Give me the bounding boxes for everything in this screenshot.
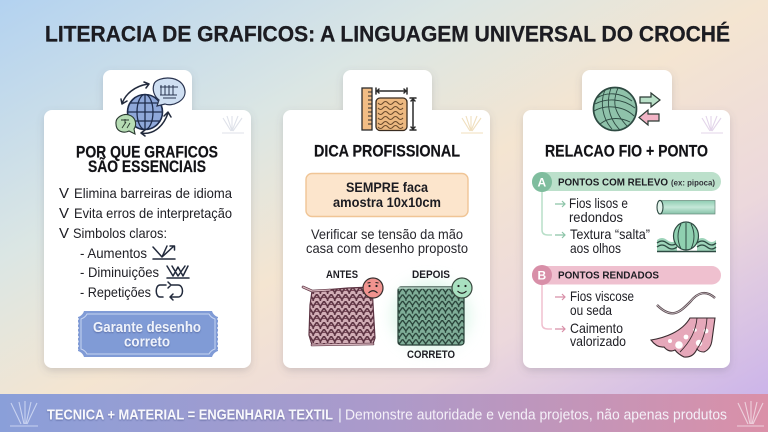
arrow and text: fios lisos [555, 195, 628, 225]
arrow and text: caimento: valorizado [570, 333, 626, 349]
callout: sempre faca amostra: amostra 10x10cm [333, 194, 441, 210]
arrow and text: textura salta: Textura “salta” [570, 226, 650, 242]
text: verificar tensao: Verificar se tensão da mão [311, 226, 463, 242]
heading: RELACAO FIO + PONTO [545, 142, 708, 160]
icon: aumentos symbol [153, 246, 175, 259]
heading [76, 144, 218, 176]
icon: lace fabric [651, 318, 715, 357]
checklist: - Aumentos [80, 245, 147, 261]
panel: dica profissional [283, 70, 490, 368]
icon: popcorn stitch [657, 222, 716, 252]
callout: sempre faca amostra: SEMPRE faca [346, 179, 428, 195]
antes swatch [303, 269, 383, 345]
arrow and text: textura salta: aos olhos [570, 240, 621, 256]
arrow and text: fios viscose: ou seda [570, 302, 612, 318]
checklist: Elimina barreiras de idioma [74, 185, 232, 201]
icon: sad face [363, 278, 383, 298]
section A: pontos com relevo: PONTOS COM RELEVO [558, 176, 668, 188]
card shape 2 [283, 70, 490, 368]
icon: globe with translation bubbles [116, 78, 185, 136]
heading: SÃO ESSENCIAIS [88, 156, 206, 176]
footer text: TECNICA + MATERIAL = ENGENHARIA TEXTIL [47, 406, 333, 424]
checklist: Simbolos claros: [73, 225, 167, 241]
checklist: - Diminuições [80, 264, 159, 280]
icon: diminuicoes symbol [167, 266, 189, 278]
icon: watermark [222, 116, 244, 133]
section A: pontos com relevo [532, 172, 721, 256]
callout: garante desenho correto [78, 311, 218, 357]
icon: footer logo right [737, 401, 764, 426]
footer text: Demonstre autoridade e venda projetos, não apenas produtos [345, 406, 727, 424]
callout: sempre faca amostra [306, 174, 468, 216]
text: verificar tensao [306, 226, 468, 256]
section B: pontos rendados: PONTOS RENDADOS [558, 270, 659, 282]
checklist: - Repetições [80, 284, 151, 300]
heading: DICA PROFISSIONAL [314, 142, 460, 160]
arrow and text: caimento: Caimento [570, 320, 623, 336]
section A: pontos com relevo: A [538, 176, 546, 190]
arrow and text: textura salta [555, 226, 650, 256]
antes swatch: ANTES [326, 269, 358, 281]
title: LITERACIA DE GRAFICOS: A LINGUAGEM UNIVERSAL DO CROCHÉ [45, 22, 730, 46]
checklist: V [59, 225, 69, 242]
panel: relacao fio + ponto [523, 70, 730, 368]
text: verificar tensao: casa com desenho proposto [306, 240, 468, 256]
section A: pontos com relevo: (ex: pipoca) [671, 178, 715, 188]
arrow and text: fios viscose [555, 288, 634, 318]
checklist: V [59, 185, 69, 202]
depois swatch: DEPOIS [412, 269, 450, 281]
icon: watermark [701, 116, 723, 133]
arrow and text: caimento [555, 320, 626, 349]
arrow and text: fios lisos: redondos [569, 209, 623, 225]
icon: silky yarn [657, 293, 715, 313]
depois swatch [391, 269, 472, 361]
footer text: | [338, 406, 342, 424]
icon: watermark [461, 116, 483, 133]
icon: footer logo left [10, 401, 38, 426]
panel: por que graficos [44, 70, 251, 368]
arrow and text: fios viscose: Fios viscose [570, 288, 634, 304]
icon: repeticoes symbol [156, 282, 182, 300]
heading: POR QUE GRAFICOS [76, 144, 218, 162]
callout: garante desenho correto: Garante desenho [93, 319, 201, 336]
section B: pontos rendados [532, 265, 721, 357]
arrow and text: fios lisos: Fios lisos e [569, 195, 628, 211]
depois swatch: CORRETO [407, 349, 455, 361]
icon: yarn ball and arrows [594, 88, 660, 130]
footer text [47, 406, 727, 424]
section B: pontos rendados: B [538, 268, 546, 282]
checklist: Evita erros de interpretação [74, 205, 232, 221]
footer banner [0, 394, 768, 432]
card shape 3 [523, 70, 730, 368]
icon: ruler and gauge swatch [362, 88, 416, 130]
icon: happy face [452, 278, 472, 298]
card shape 1 [44, 70, 251, 368]
checklist: V [59, 205, 69, 222]
icon: smooth yarn cylinder [657, 200, 715, 214]
callout: garante desenho correto: correto [124, 334, 170, 350]
checklist [59, 185, 232, 300]
